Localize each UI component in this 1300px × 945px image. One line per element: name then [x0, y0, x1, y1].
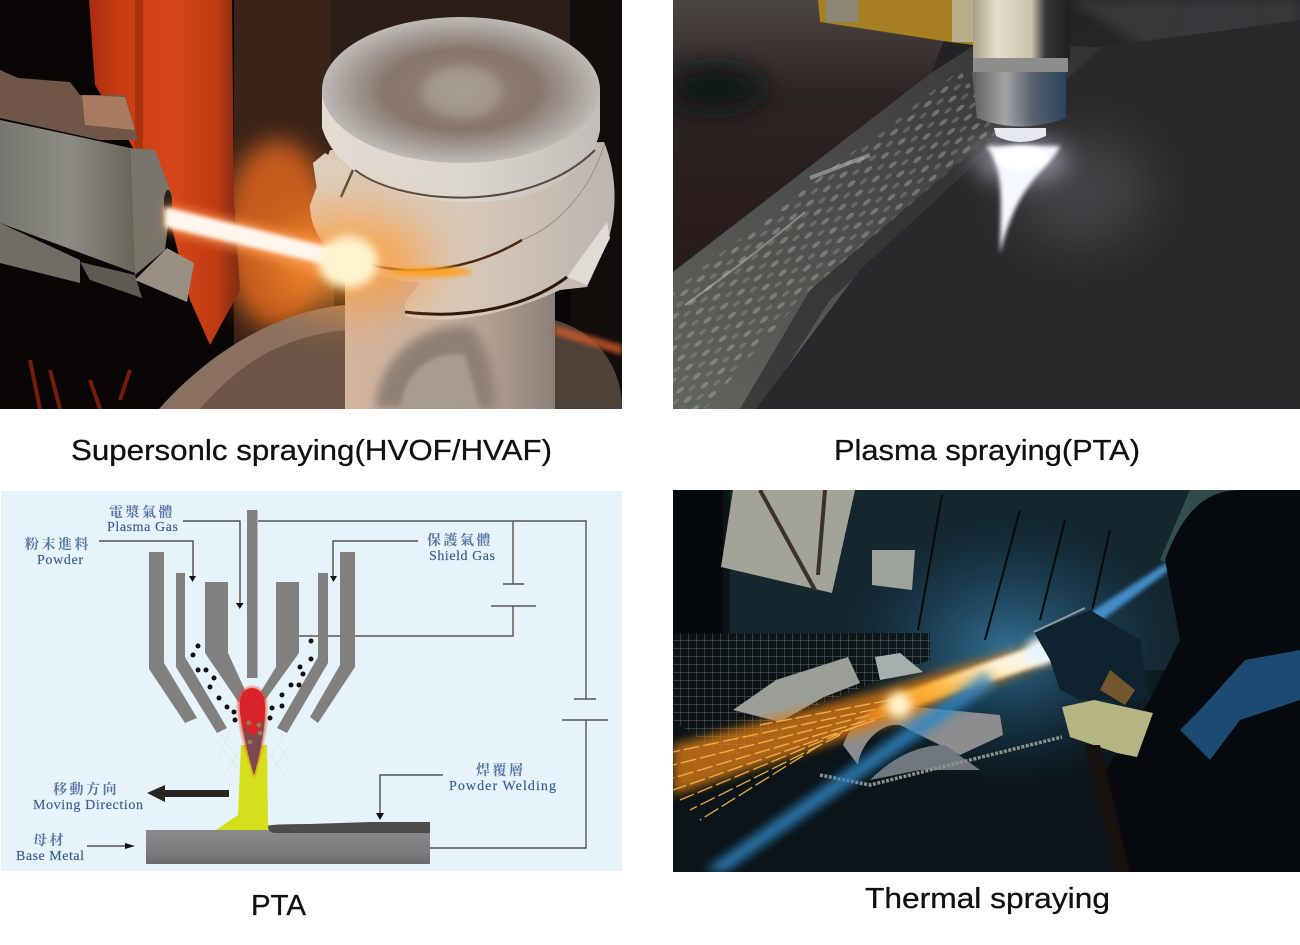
- label: plasma gas: 電漿氣體: [109, 504, 175, 521]
- panel: supersonic spraying photo: [0, 0, 622, 409]
- red machine column: [89, 0, 240, 345]
- caption: thermal spraying: Thermal spraying: [865, 883, 1110, 915]
- label: shield gas: [427, 532, 495, 564]
- label: moving direction: Moving Direction: [33, 798, 143, 813]
- label: powder: 粉末進料: [25, 536, 91, 553]
- label: powder welding: [449, 762, 556, 794]
- caption: PTA: PTA: [251, 890, 307, 922]
- panel: plasma spraying photo: [665, 0, 1300, 409]
- torch: [818, 0, 1070, 142]
- wire mesh: [673, 633, 930, 760]
- label: plasma gas: Plasma Gas: [107, 520, 178, 535]
- nozzle walls: [149, 510, 355, 733]
- label: base metal: Base Metal: [16, 849, 84, 864]
- coated piston column: [345, 273, 555, 409]
- powder particles: [190, 638, 314, 722]
- panel: thermal spraying photo: [673, 490, 1300, 872]
- plasma arc: [237, 686, 267, 778]
- flame: [270, 217, 430, 307]
- label: moving direction: 移動方向: [53, 781, 119, 798]
- sparks haze: [212, 730, 296, 780]
- welder: [1034, 490, 1300, 872]
- spiral blades: [310, 142, 615, 320]
- label: base metal: [16, 832, 84, 864]
- base metal: [146, 830, 430, 864]
- chain edge: [820, 737, 1062, 785]
- label: base metal: 母材: [33, 832, 66, 849]
- label: shield gas: 保護氣體: [427, 532, 493, 549]
- label: moving direction: [33, 781, 143, 813]
- cloth and workpieces: [733, 657, 860, 722]
- label: shield gas: Shield Gas: [429, 549, 495, 564]
- label: powder welding: 焊覆層: [475, 762, 526, 779]
- leader lines and arrowheads: [87, 521, 443, 846]
- top disc: [322, 90, 600, 202]
- caption: plasma spraying: Plasma spraying(PTA): [834, 435, 1140, 467]
- powder welding layer: [268, 822, 430, 833]
- white panel and bracket: [721, 490, 855, 593]
- curved part lower left: [159, 305, 360, 409]
- label: powder welding: Powder Welding: [449, 779, 556, 794]
- weld bead band: [673, 45, 1102, 409]
- deposit plume: [216, 745, 270, 830]
- moving direction arrow: [147, 785, 229, 802]
- plasma spark: [972, 138, 1068, 254]
- spark stream: [673, 550, 1190, 872]
- spraying gun: [0, 70, 194, 302]
- label: powder: [25, 536, 91, 568]
- caption: supersonic spraying: Supersonlc spraying(HVOF/HVAF): [71, 435, 552, 467]
- label: plasma gas: [107, 504, 178, 535]
- panel: PTA diagram: [1, 491, 622, 871]
- circuit wires: [258, 521, 608, 848]
- label: powder: Powder: [37, 553, 83, 568]
